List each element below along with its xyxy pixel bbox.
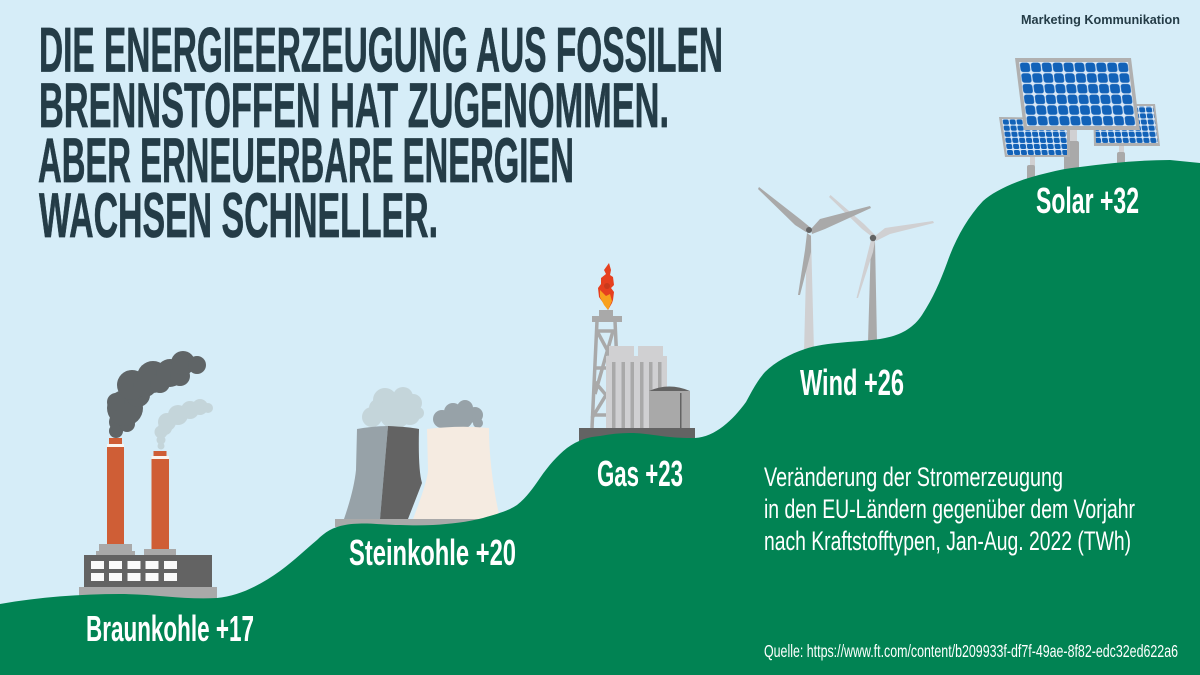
stands	[1027, 127, 1125, 181]
front panel	[1015, 58, 1140, 130]
title: WACHSEN SCHNELLER.	[39, 181, 438, 251]
label: Gas: Gas +23	[597, 453, 683, 494]
light steam	[362, 387, 424, 429]
tower base	[335, 519, 505, 527]
dark smoke	[107, 351, 206, 438]
tower	[592, 321, 620, 428]
label: Wind: Wind +26	[800, 362, 904, 403]
right tower	[413, 427, 500, 519]
icon: gas plant	[579, 263, 695, 446]
title: BRENNSTOFFEN HAT ZUGENOMMEN.	[39, 71, 669, 141]
flare head	[592, 310, 622, 322]
plant building	[84, 555, 212, 587]
light smoke	[154, 399, 213, 450]
icon: cooling towers	[335, 387, 505, 527]
storage tank	[649, 386, 690, 430]
left panel	[999, 117, 1070, 157]
green hill	[0, 160, 1200, 675]
title	[38, 16, 723, 251]
plant base	[79, 544, 217, 603]
tanks	[606, 346, 667, 429]
label: Steinkohle: Steinkohle +20	[349, 532, 516, 573]
description text	[764, 462, 1135, 556]
department label: Marketing Kommunikation	[1021, 13, 1180, 27]
icon: wind turbines	[758, 187, 934, 352]
description text: Veränderung der Stromerzeugung	[764, 462, 1063, 492]
label: Braunkohle: Braunkohle +17	[86, 608, 254, 649]
icon: solar panels	[999, 58, 1160, 181]
flame	[598, 263, 614, 310]
left tower	[344, 426, 422, 519]
rear turbine	[829, 195, 934, 342]
title: ABER ERNEUERBARE ENERGIEN	[38, 126, 574, 196]
front turbine	[758, 187, 871, 352]
label: Solar: Solar +32	[1036, 180, 1139, 221]
left chimney	[107, 438, 124, 544]
right panel	[1093, 104, 1160, 146]
base	[579, 428, 695, 446]
dark steam	[433, 400, 483, 431]
icon: lignite power plant	[79, 351, 217, 603]
right chimney	[152, 451, 169, 549]
